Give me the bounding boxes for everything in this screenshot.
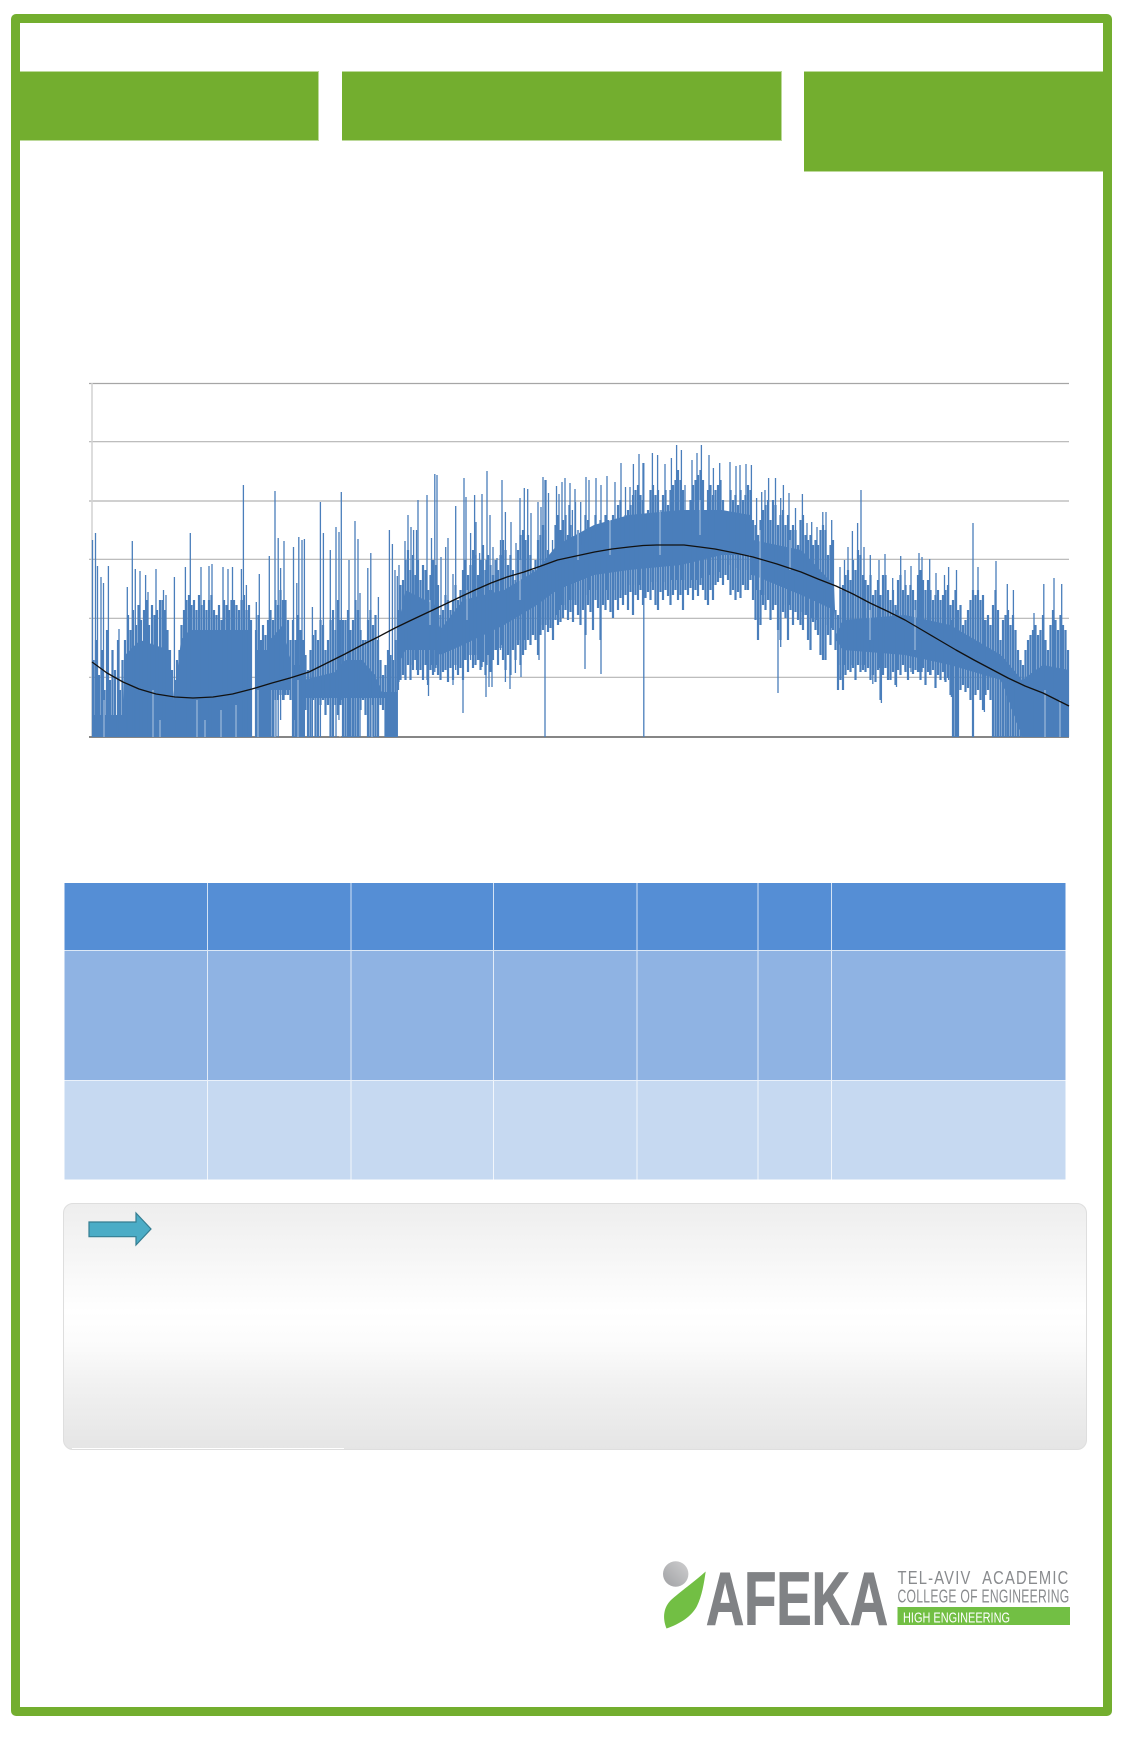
line chart with trendline — [89, 382, 1070, 738]
data series: dense texture, falling band — [753, 500, 1068, 737]
logo tagline line 1: TEL-AVIV ACADEMIC — [898, 1567, 1070, 1588]
data series: dense core — [92, 510, 1069, 737]
callout panel — [63, 1203, 1087, 1450]
logo strip text: HIGH ENGINEERING — [903, 1610, 1010, 1626]
table row 2 — [64, 1080, 1066, 1180]
data series: dense texture, rising band — [398, 470, 750, 690]
chart gridlines and axes — [89, 383, 1069, 737]
table row 1 — [64, 950, 1066, 1080]
data series: spikes — [92, 445, 1062, 737]
callout bottom highlight — [72, 1448, 344, 1449]
logo leaf — [664, 1572, 706, 1628]
table cell separators — [64, 883, 1066, 1180]
logo green strip — [898, 1607, 1070, 1625]
header bar: left — [20, 71, 319, 141]
header bar: right — [804, 71, 1103, 172]
table header row — [64, 883, 1066, 950]
polynomial trendline — [92, 545, 1069, 706]
data series: dense texture, lower-left block — [94, 590, 396, 737]
data table — [64, 883, 1066, 1180]
logo wordmark: AFEKA — [706, 1556, 888, 1640]
header bar: centre — [342, 71, 782, 141]
data series: light slivers — [104, 500, 1060, 737]
logo sphere — [663, 1561, 688, 1587]
